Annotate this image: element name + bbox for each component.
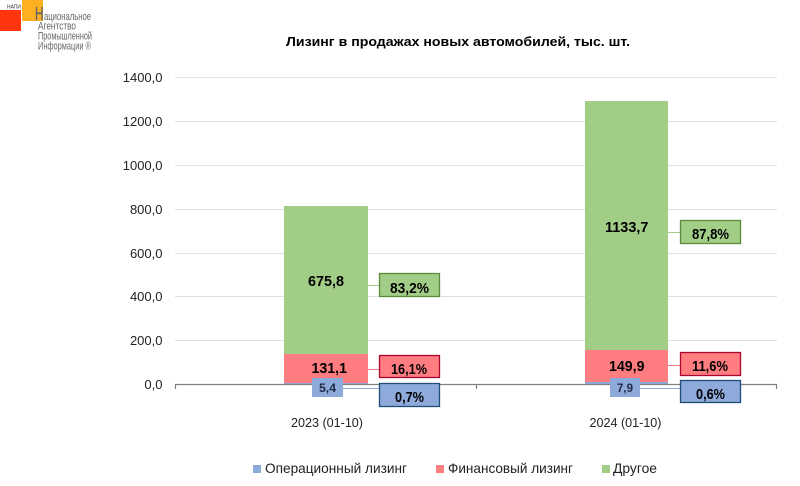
logo	[0, 0, 92, 52]
y axis labels: 400,0	[130, 289, 162, 304]
logo: ациональное	[44, 11, 91, 23]
value label: 1133,7: 1133,7	[605, 220, 648, 236]
legend: operational leasing: Операционный лизинг	[265, 460, 407, 476]
value label: 675,8: 675,8	[308, 274, 344, 290]
y axis labels: 1400,0	[123, 70, 162, 85]
y axis labels	[123, 70, 162, 392]
legend: financial leasing: Финансовый лизинг	[448, 460, 573, 476]
legend	[253, 460, 657, 476]
logo: Н	[35, 4, 44, 24]
callout: 16,1%: 16,1%	[391, 362, 427, 378]
title: Лизинг в продажах новых автомобилей, тыс. шт.	[286, 34, 630, 49]
value label: 149,9: 149,9	[609, 359, 644, 375]
value label: 5,4: 5,4	[319, 381, 336, 395]
bar: 2023	[284, 206, 368, 385]
value label: 7,9: 7,9	[617, 381, 633, 395]
callout: 11,6%: 11,6%	[692, 359, 728, 375]
x axis	[175, 384, 777, 389]
value label: 5,4	[312, 378, 343, 397]
callout: 83,2%: 83,2%	[390, 281, 429, 297]
y axis labels: 1000,0	[123, 158, 162, 173]
logo: Агентство	[38, 20, 76, 32]
x label: 2023: 2023 (01-10)	[291, 415, 363, 430]
value label: 131,1: 131,1	[312, 361, 347, 377]
x label: 2024: 2024 (01-10)	[590, 415, 662, 430]
y axis labels: 0,0	[144, 377, 162, 392]
callout: 0,6%: 0,6%	[696, 387, 725, 403]
logo: Промышленной	[38, 30, 92, 42]
callout: 83,2%	[380, 274, 440, 297]
legend: other: Другое	[613, 460, 657, 476]
y axis labels: 200,0	[130, 333, 162, 348]
callout: 87,8%: 87,8%	[692, 227, 729, 243]
callout: 87,8%	[680, 220, 740, 244]
callout: 0,6%	[680, 380, 740, 403]
logo: Информации ®	[38, 40, 91, 52]
callout: 11,6%	[680, 352, 740, 376]
bar: 2024	[585, 101, 668, 385]
callout: 0,7%	[380, 384, 440, 406]
y axis labels: 800,0	[130, 202, 162, 217]
callout: 0,7%: 0,7%	[395, 390, 424, 406]
callout: 16,1%	[380, 356, 440, 378]
y axis labels: 1200,0	[123, 114, 162, 129]
value label: 7,9	[610, 378, 640, 397]
logo: НАПИ	[7, 4, 21, 10]
y axis labels: 600,0	[130, 246, 162, 261]
